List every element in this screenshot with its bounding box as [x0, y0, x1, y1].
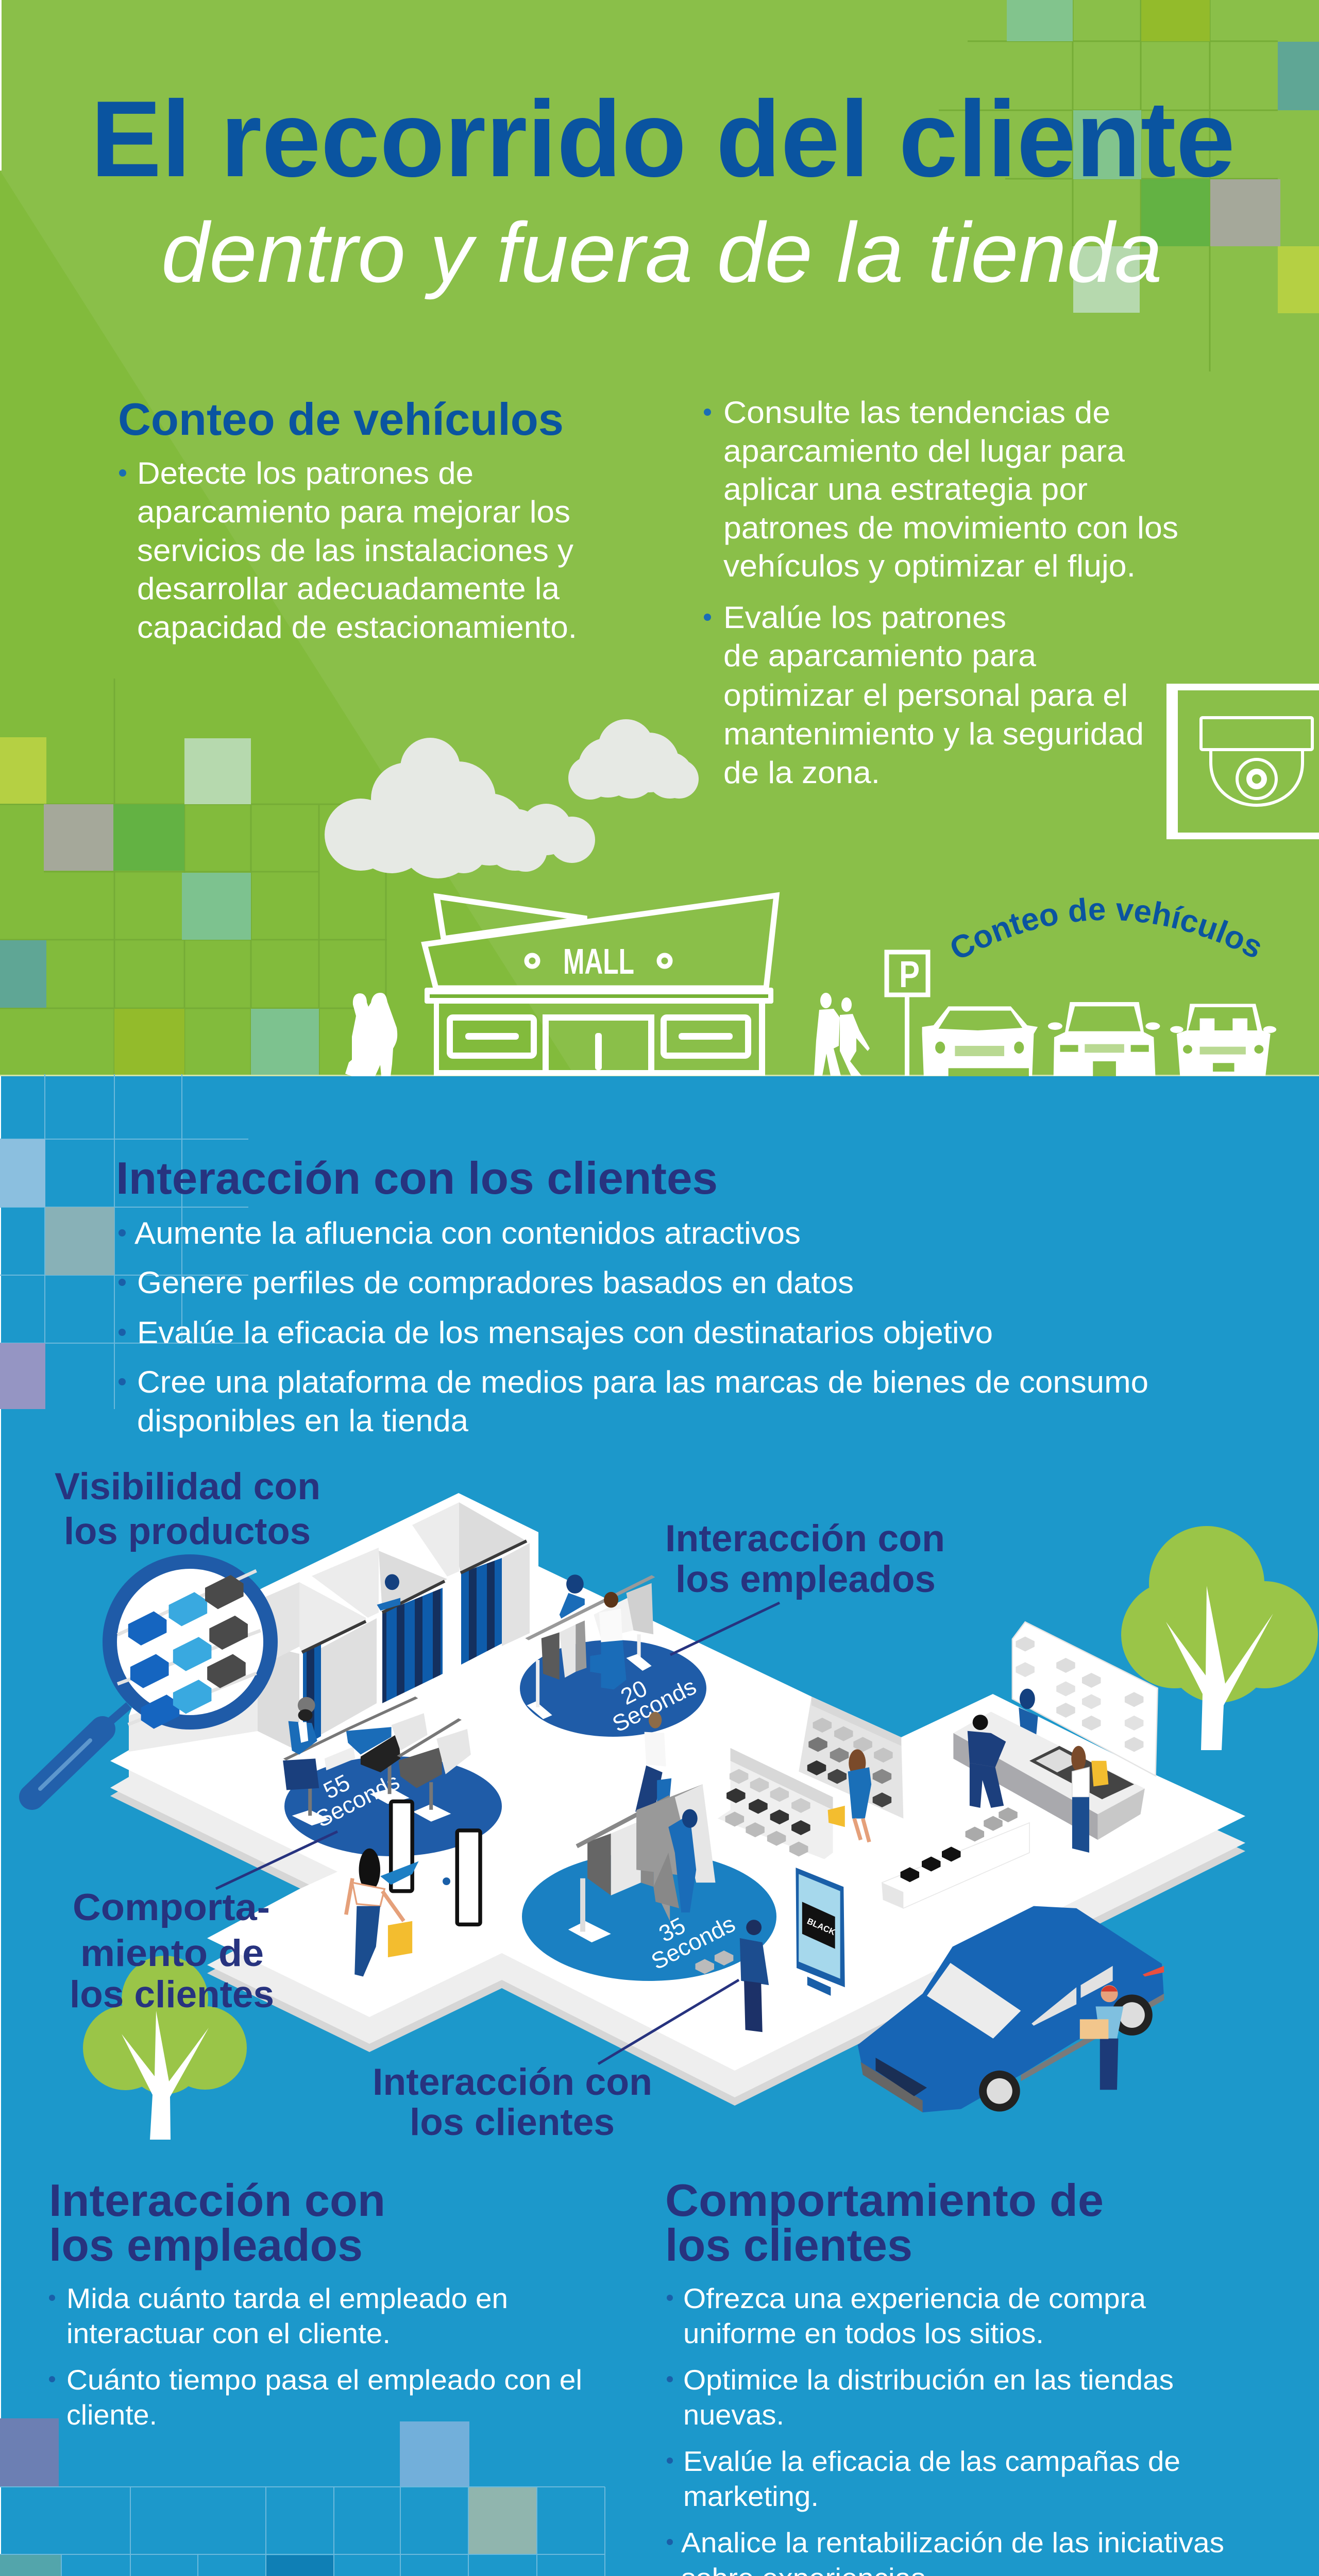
label: employee interaction: [665, 1518, 945, 1600]
disc label: 55 seconds: Seconds: [311, 1768, 403, 1833]
label: customer interaction: [373, 2061, 652, 2143]
text block: right bullets: aplicar una estrategia por: [723, 472, 1088, 506]
text block: customer interaction bullets: Evalúe la eficacia de los mensajes con destinatarios objetivo: [137, 1315, 993, 1350]
icon: small cloud: [568, 719, 699, 800]
text block: left bullet: aparcamiento para mejorar los: [137, 495, 570, 529]
digital signage kiosk: BLACK: [806, 1916, 837, 1937]
label: employee interaction: los empleados: [675, 1558, 936, 1600]
panel: customer behaviour text: [665, 2175, 1224, 2576]
cashier counter: [953, 1689, 1145, 1840]
panel: green vehicle counting section: [0, 0, 1319, 1076]
callout: magnifier product visibility: [32, 1562, 270, 1797]
disc label: 35 seconds: Seconds: [647, 1910, 739, 1975]
heading: employee interaction: [49, 2175, 385, 2270]
text block: employee bullets: cliente.: [66, 2399, 157, 2431]
label: customer behaviour: los clientes: [70, 1974, 274, 2015]
icon: left tree: [83, 1956, 247, 2140]
text block: behaviour bullets: Ofrezca una experiencia de compra: [683, 2282, 1146, 2314]
disc label: 20 seconds: 20: [616, 1675, 651, 1710]
illustration: blue car and delivery man: [858, 1906, 1164, 2112]
text block: behaviour bullets: Optimice la distribución en las tiendas: [683, 2364, 1174, 2396]
text block: left bullet: [119, 456, 577, 645]
curved label: vehicle counting: Conteo de vehículos: [951, 897, 1260, 957]
icon: mall building: [425, 895, 776, 1076]
text block: employee bullets: Mida cuánto tarda el empleado en: [66, 2282, 508, 2314]
heading: customer behaviour: [665, 2175, 1104, 2270]
text block: customer interaction bullets: Aumente la afluencia con contenidos atractivos: [134, 1216, 801, 1250]
text block: behaviour bullets: [667, 2282, 1224, 2576]
disc label: 55 seconds: [301, 1749, 403, 1833]
text block: customer interaction bullets: Cree una plataforma de medios para las marcas de bienes de consumo: [137, 1365, 1148, 1399]
text block: right bullets: de la zona.: [723, 755, 880, 790]
panel: employee interaction text: [49, 2175, 582, 2431]
disc label: 35 seconds: 35: [654, 1912, 689, 1947]
disc label: 55 seconds: 55: [319, 1769, 354, 1804]
text block: left bullet: capacidad de estacionamiento.: [137, 610, 577, 645]
standing man: [696, 1920, 769, 2032]
clothing rack, gates and shopper: [346, 1797, 670, 1976]
text block: behaviour bullets: Analice la rentabilización de las iniciativas: [681, 2527, 1224, 2558]
text block: behaviour bullets: nuevas.: [683, 2399, 784, 2431]
icon: large cloud: [325, 738, 595, 878]
heading: customer interaction: Interacción con los clientes: [116, 1153, 718, 1204]
icon: couple silhouette: [814, 993, 870, 1076]
label: employee interaction: Interacción con: [665, 1518, 945, 1560]
heading: vehicle counting: Conteo de vehículos: [118, 394, 564, 445]
text block: right bullets: Evalúe los patrones: [723, 600, 1006, 635]
text block: behaviour bullets: Evalúe la eficacia de las campañas de: [683, 2445, 1180, 2477]
label: customer interaction: los clientes: [410, 2102, 615, 2143]
illustration: isometric store floor: [110, 1493, 1245, 2106]
decorative squares bottom left: [0, 737, 319, 1075]
text block: employee bullets: [49, 2282, 582, 2431]
text block: left bullet: servicios de las instalaciones y: [137, 533, 573, 568]
icon: security camera: [1166, 684, 1319, 839]
decorative squares upper left: [0, 1139, 114, 1409]
label: customer behaviour: [70, 1887, 274, 2015]
icon: parking sign: P: [899, 954, 920, 995]
label: customer behaviour: Comporta-: [73, 1887, 270, 1928]
fitting rooms: [129, 1502, 530, 1752]
text block: right bullets: vehículos y optimizar el flujo.: [723, 549, 1136, 583]
label: product visibility: [55, 1466, 320, 1552]
shelf unit B: [718, 1748, 833, 1859]
text block: right bullets: Consulte las tendencias de: [723, 395, 1110, 430]
label: product visibility: los productos: [64, 1511, 311, 1552]
text block: customer interaction bullets: [119, 1216, 1148, 1438]
label: product visibility: Visibilidad con: [55, 1466, 320, 1507]
title: El recorrido del cliente: [91, 78, 1235, 199]
display table with shoes: [882, 1807, 1029, 1908]
icon: right tree: [1121, 1526, 1318, 1750]
label: customer interaction: Interacción con: [373, 2061, 652, 2103]
customers at counter: [968, 1715, 1108, 1853]
text block: behaviour bullets: uniforme en todos los sitios.: [683, 2317, 1044, 2349]
panel: blue customer interaction section: [0, 1074, 1319, 2576]
heading: employee interaction: Interacción con: [49, 2175, 385, 2226]
shelf unit A: [799, 1697, 903, 1819]
decorative squares and grid lower left: [0, 2418, 605, 2576]
text block: right bullets: mantenimiento y la seguridad: [723, 717, 1144, 751]
text block: right bullets: [704, 395, 1178, 790]
text block: customer interaction bullets: Genere perfiles de compradores basados en datos: [137, 1265, 854, 1300]
icon: family silhouette: [345, 993, 397, 1076]
text block: employee bullets: interactuar con el cliente.: [66, 2317, 391, 2349]
mall sign: MALL: [563, 941, 634, 981]
text block: left bullet: desarrollar adecuadamente la: [137, 571, 560, 606]
icon: parked cars: [922, 1002, 1276, 1076]
shelves, counter, display tables and people, right side: [636, 1622, 1158, 2032]
label: customer behaviour: miento de: [80, 1933, 264, 1974]
heading: customer behaviour: Comportamiento de: [665, 2175, 1104, 2226]
heading: customer behaviour: los clientes: [665, 2219, 912, 2270]
text block: employee bullets: Cuánto tiempo pasa el empleado con el: [66, 2364, 582, 2396]
text block: behaviour bullets: marketing.: [683, 2480, 819, 2512]
shopper at shelves: [828, 1749, 871, 1842]
text block: right bullets: patrones de movimiento con los: [723, 511, 1178, 545]
clothing racks and people, left and centre: [283, 1574, 671, 1825]
subtitle: dentro y fuera de la tienda: [161, 205, 1162, 300]
digital signage kiosk: [796, 1868, 845, 1996]
icon: parking sign: [887, 952, 928, 1076]
heading: employee interaction: los empleados: [49, 2219, 363, 2270]
decorative squares top right: [1007, 0, 1319, 313]
text block: customer interaction bullets: disponibles en la tienda: [137, 1403, 469, 1438]
text block: left bullet: Detecte los patrones de: [137, 456, 474, 490]
text block: right bullets: de aparcamiento para: [723, 638, 1037, 673]
time zone discs: [284, 1640, 776, 1981]
wall shelving behind counter: [1012, 1622, 1158, 1776]
text block: right bullets: optimizar el personal para el: [723, 678, 1128, 713]
leader lines from labels: [216, 1603, 780, 2064]
disc label: 20 seconds: Seconds: [608, 1673, 700, 1737]
text block: right bullets: aparcamiento del lugar para: [723, 434, 1125, 468]
